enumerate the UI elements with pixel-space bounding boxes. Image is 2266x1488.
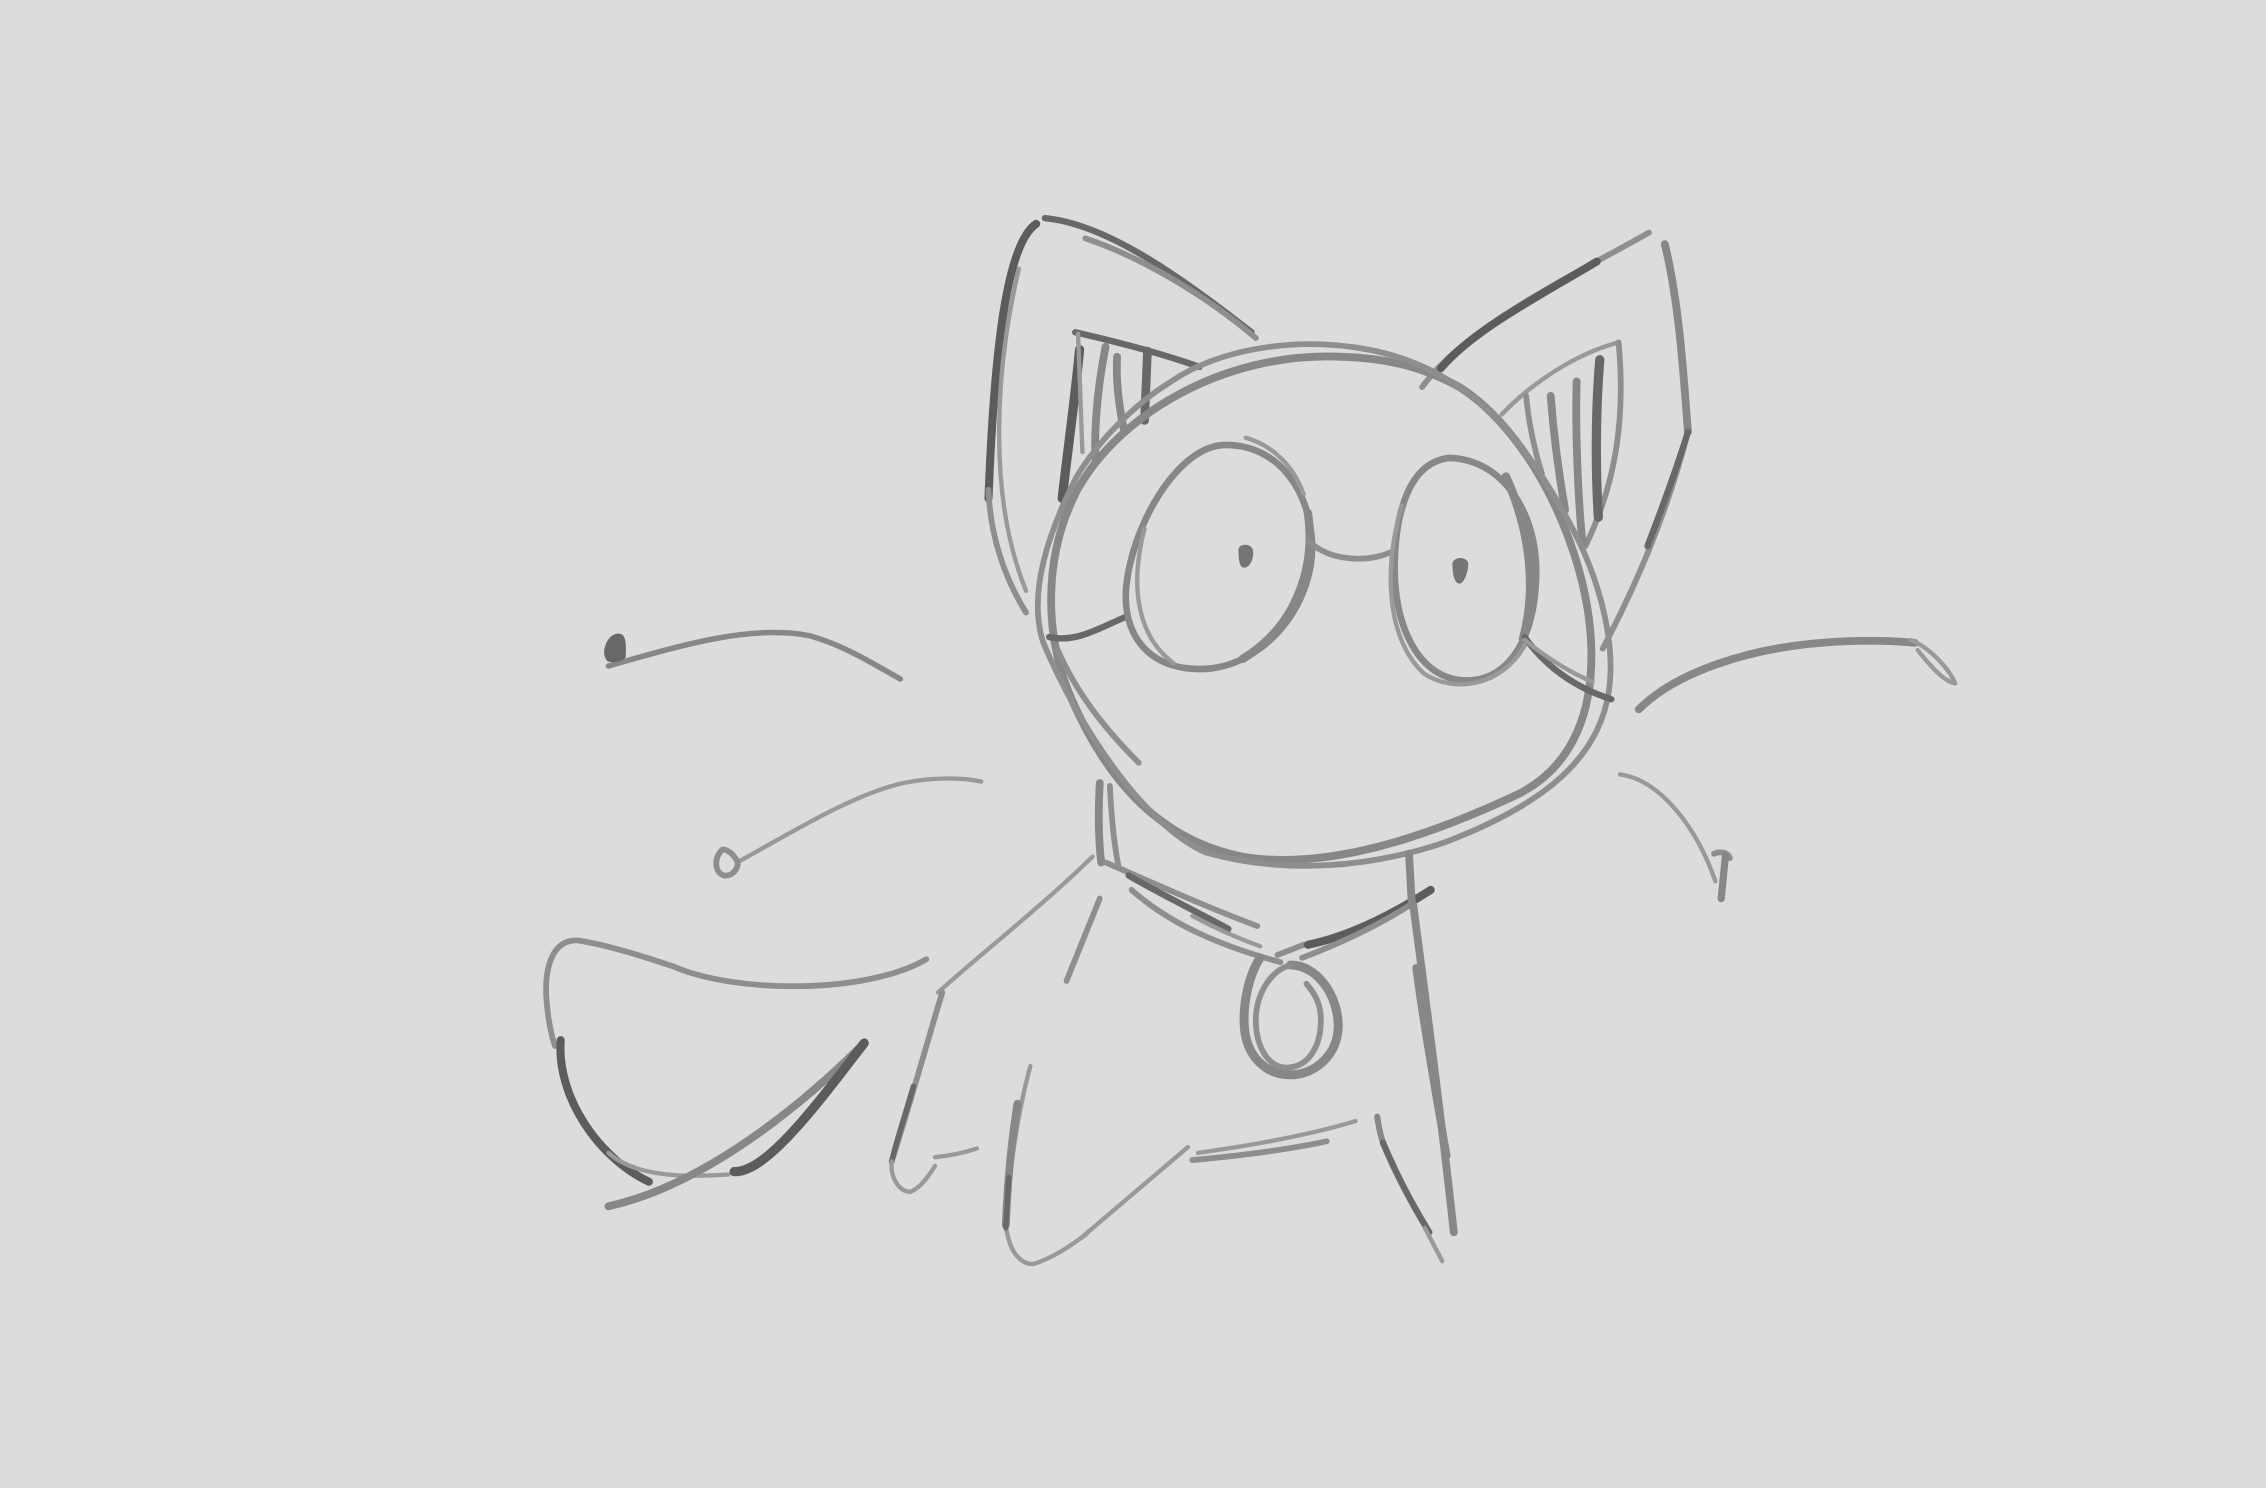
collar xyxy=(1099,783,1431,962)
body front xyxy=(1006,1066,1356,1264)
left glasses lens xyxy=(1126,438,1312,669)
head outline xyxy=(1038,344,1611,866)
right ear xyxy=(1422,233,1688,649)
whisker top right xyxy=(1639,640,1955,709)
body right side xyxy=(1377,854,1454,1261)
tail xyxy=(546,940,926,1206)
right pupil xyxy=(1452,558,1468,584)
whisker middle left xyxy=(716,778,981,876)
whisker lower right xyxy=(1620,774,1730,899)
left pupil xyxy=(1238,545,1253,568)
whisker top left xyxy=(604,632,900,679)
left ear xyxy=(988,218,1256,613)
right glasses lens xyxy=(1391,458,1536,684)
glasses bridge xyxy=(1309,542,1392,559)
collar tag xyxy=(1244,958,1338,1075)
body left arm xyxy=(892,857,1100,1192)
right cheek mark xyxy=(1525,637,1611,699)
